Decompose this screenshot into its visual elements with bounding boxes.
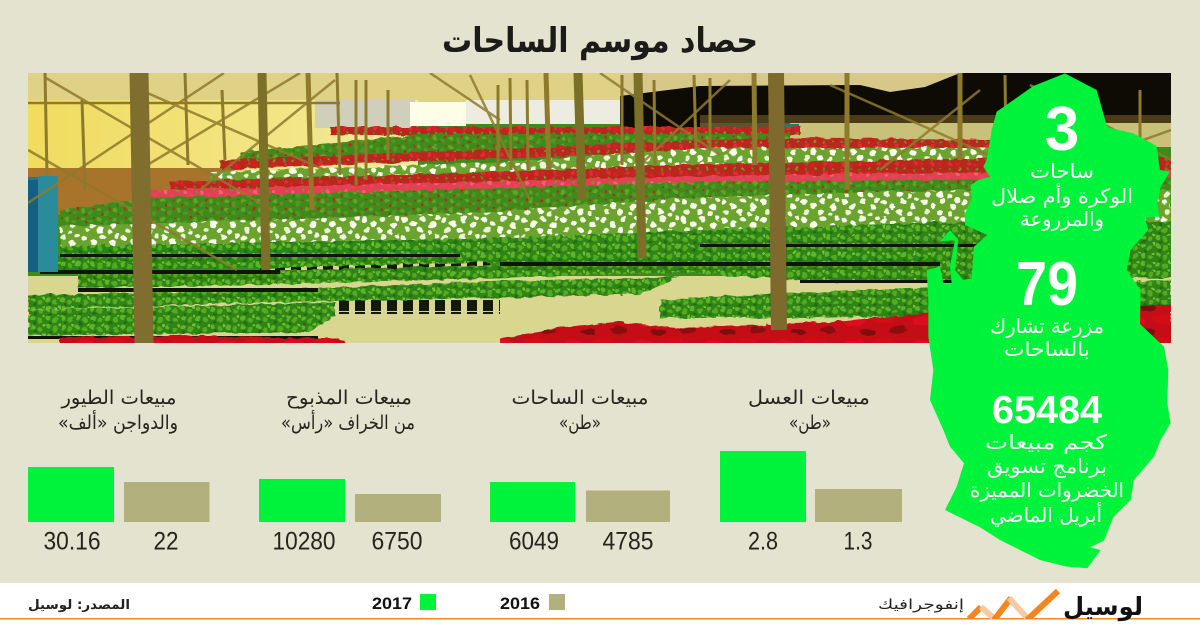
heading: markets: مبيعات الساحات [512,387,648,409]
figure: 65484: أبريل الماضي [990,502,1102,528]
figure: 3 [991,95,1133,231]
infographic label: إنفوجرافيك [878,597,964,613]
figure: 79 [990,250,1104,361]
blue barrels [28,176,58,272]
figure: 3: 3 [1045,95,1079,164]
figure: 65484: برنامج تسويق [987,454,1107,478]
photo: greenhouse with flower rows [28,73,1171,345]
chart: poultry sales: 22 [154,528,178,556]
chart: honey sales: 1.3 [844,528,872,556]
figure: 79: بالساحات [1004,337,1090,361]
heading: sheep [281,387,415,434]
legend: 2017 [372,594,436,613]
qatar map with key figures [927,73,1171,568]
heading: sheep: مبيعات المذبوح [286,387,412,409]
pots and benches [28,258,1171,344]
heading: markets: «طن» [559,412,601,434]
chart: honey sales [720,387,902,556]
logo: لوسيل [1063,592,1143,622]
figure: 3: والمزروعة [1020,207,1104,231]
green plant benches [28,242,1171,336]
map shape [927,73,1171,568]
figure: 3: الوكرة وأم صلال [991,183,1133,208]
chart: slaughtered sheep sales: 10280 [272,528,336,556]
figure: 65484 [970,389,1124,528]
footer [0,583,1200,629]
heading: markets [512,387,648,434]
legend: 2016 [500,594,565,613]
chart: poultry sales: 30.16 [44,528,100,556]
chart: poultry sales [28,387,210,556]
heading: poultry: والدواجن «ألف» [58,410,178,434]
figure: 79: 79 [1016,250,1078,319]
chart: market sales [490,387,670,556]
heading: poultry [58,387,178,434]
source: المصدر: لوسيل [28,598,130,613]
bench shadows [28,244,1000,339]
heading: sheep: من الخراف «رأس» [281,410,415,434]
chart: slaughtered sheep sales: 6750 [372,528,422,556]
flower rows [60,127,1171,258]
figure: 65484: كجم مبيعات [985,430,1108,454]
poinsettia strip [60,305,1171,345]
steel frame posts and braces [28,73,1171,343]
chart: slaughtered sheep sales [259,387,441,556]
figure: 3: ساحات [1030,159,1094,183]
chart: honey sales: 2.8 [748,528,778,556]
heading: poultry: مبيعات الطيور [60,387,177,409]
chart: market sales: 6049 [509,528,559,556]
heading: honey: مبيعات العسل [748,387,870,409]
logo [969,591,1143,622]
title: حصاد موسم الساحات [442,21,758,61]
figure: 79: مزرعة تشارك [990,314,1104,338]
legend: 2017: 2017 [372,594,412,613]
figure: 65484: الخضروات المميزة [970,478,1124,502]
figure: 65484: 65484 [992,389,1102,432]
greenhouse back wall and roof [28,73,1171,276]
legend: 2016: 2016 [500,594,540,613]
heading: honey: «طن» [789,412,831,434]
heading: honey [748,387,870,434]
chart: market sales: 4785 [602,528,654,556]
